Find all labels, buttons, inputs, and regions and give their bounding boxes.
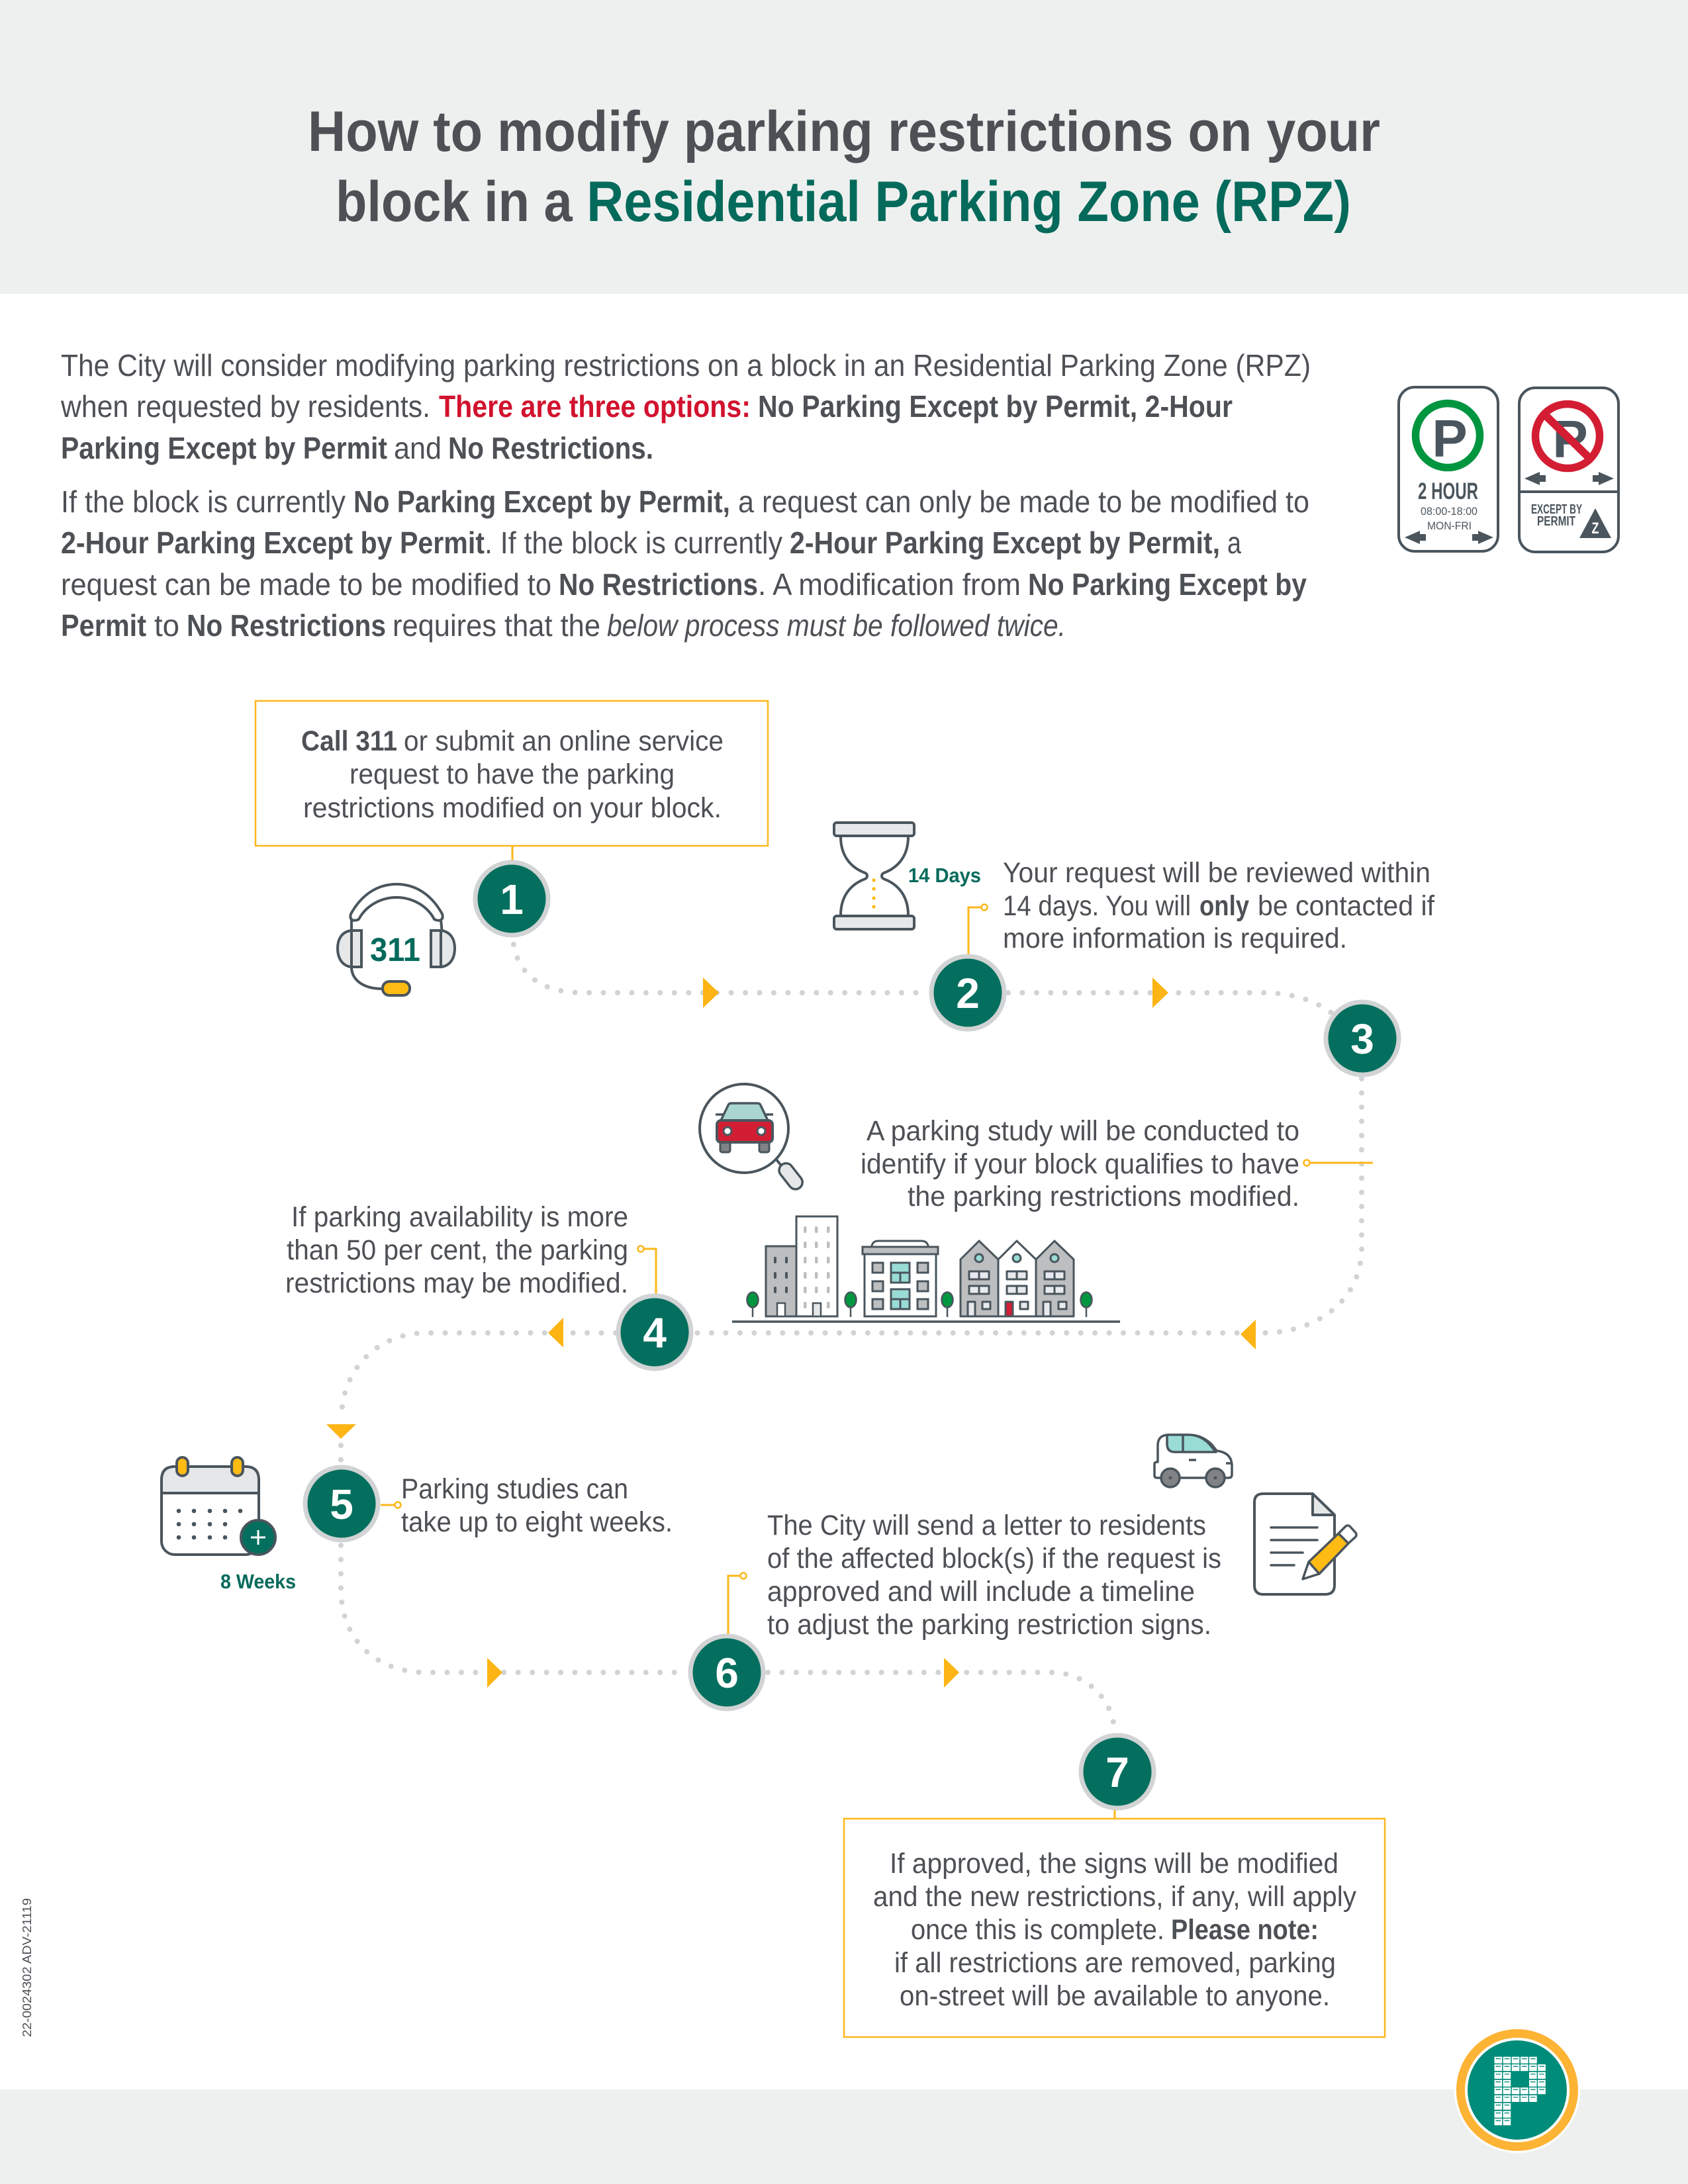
icon: no parking except by permit sign <box>1519 388 1618 552</box>
apartment block <box>863 1241 938 1316</box>
step 7 callout box: if all restrictions are removed, parking <box>894 1947 1336 1979</box>
step 3 text <box>861 1115 1299 1212</box>
icon: letter and pencil <box>1254 1494 1356 1594</box>
icon: 2 hour parking sign <box>1399 387 1498 551</box>
icon: 2 hour parking sign: MON-FRI <box>1427 520 1472 532</box>
intro text: No Parking Except by Permit, <box>353 484 730 519</box>
step 6 text: to adjust the parking restriction signs. <box>767 1609 1211 1641</box>
step 7 callout box: Please note: <box>1171 1914 1319 1946</box>
step 2 marker: 2 <box>956 970 980 1017</box>
intro text: to <box>154 608 179 643</box>
label: 8 weeks: 8 Weeks <box>220 1570 296 1593</box>
intro text: No Restrictions. <box>448 431 653 465</box>
step 5 marker: 5 <box>330 1480 353 1528</box>
step 4 marker: 4 <box>643 1309 667 1357</box>
step 4 text <box>285 1201 628 1299</box>
intro text: The City will consider modifying parking restrictions on a block in an Residential Parking Zone (RPZ) <box>61 348 1311 383</box>
step 3 text: A parking study will be conducted to <box>867 1115 1299 1147</box>
step 6 text: The City will send a letter to residents <box>767 1510 1206 1541</box>
step 6 marker: 6 <box>715 1649 739 1697</box>
icon: hourglass <box>834 823 914 929</box>
step 7 marker <box>1081 1735 1154 1808</box>
intro text: and <box>394 431 442 465</box>
icon: 2 hour parking sign: P <box>1432 409 1468 468</box>
icon: car side view <box>1154 1435 1232 1487</box>
intro text: No Restrictions <box>187 608 386 643</box>
process path: dotted route <box>341 944 1362 1722</box>
header band <box>0 0 1688 294</box>
document code, vertical: 22-0024302 ADV-21119 <box>20 1898 34 2037</box>
title: block in a Residential Parking Zone (RPZ) <box>336 170 1351 234</box>
step 4 text: If parking availability is more <box>291 1201 628 1233</box>
step 7 marker: 7 <box>1105 1749 1129 1796</box>
step 5 text: take up to eight weeks. <box>401 1506 673 1538</box>
step 7 callout box <box>844 1819 1385 2037</box>
step 2 text: 14 days. You will <box>1003 890 1191 922</box>
step 5 text <box>401 1473 673 1538</box>
icon: no parking except by permit sign: Z <box>1591 520 1599 537</box>
step 1 callout box: request to have the parking <box>350 758 675 790</box>
title: How to modify parking restrictions on your <box>308 100 1380 163</box>
intro text: 2-Hour Parking Except by Permit, <box>790 525 1220 560</box>
intro text: No Parking Except by Permit, 2-Hour <box>758 389 1233 424</box>
step 1 marker <box>475 862 548 935</box>
icon: calendar <box>162 1457 275 1555</box>
step 6 marker <box>690 1636 763 1709</box>
icon: no parking except by permit sign: P <box>1552 410 1588 469</box>
icon: no parking except by permit sign: PERMIT <box>1537 514 1575 529</box>
intro text: when requested by residents. <box>60 389 430 424</box>
step 2 text <box>1003 857 1435 954</box>
step 6 text: approved and will include a timeline <box>767 1576 1195 1608</box>
icon: magnifier with car <box>700 1084 805 1192</box>
title <box>308 100 1380 234</box>
step 7 callout box: once this is complete. <box>911 1914 1164 1946</box>
label: 14 days: 14 Days <box>908 864 981 887</box>
intro text: a <box>1227 525 1241 560</box>
step 1 callout box: Call 311 <box>301 725 397 757</box>
step 4 text: than 50 per cent, the parking <box>287 1234 628 1266</box>
icon: no parking except by permit sign: EXCEPT BY <box>1531 502 1582 517</box>
step 5 text: Parking studies can <box>401 1473 628 1505</box>
intro text: a request can only be made to be modified to <box>738 484 1309 519</box>
intro text: If the block is currently <box>61 484 346 519</box>
intro text: below process must be followed twice. <box>607 608 1066 643</box>
step 7 callout box: and the new restrictions, if any, will apply <box>873 1881 1356 1913</box>
arrows: orange direction markers <box>326 978 1256 1688</box>
step 3 text: identify if your block qualifies to have <box>861 1148 1299 1180</box>
step 6 text: of the affected block(s) if the request is <box>767 1543 1221 1574</box>
intro text: There are three options: <box>439 389 751 424</box>
step 1 callout box <box>256 701 768 846</box>
icon: 311 headset: 311 <box>370 931 420 968</box>
icon: 2 hour parking sign: 08:00-18:00 <box>1421 506 1477 518</box>
step 3 text: the parking restrictions modified. <box>908 1181 1299 1212</box>
step 7 callout box: If approved, the signs will be modified <box>890 1848 1338 1880</box>
intro text: Permit <box>61 608 146 643</box>
step 1 callout box: or submit an online service <box>404 725 724 757</box>
footer band <box>0 2089 1688 2184</box>
step 3 marker <box>1326 1002 1399 1075</box>
logo cars forming a letter P <box>1495 2059 1546 2122</box>
intro text: 2-Hour Parking Except by Permit <box>61 525 485 560</box>
step 7 callout box: on-street will be available to anyone. <box>900 1980 1330 2012</box>
intro text: requires that the <box>393 608 600 643</box>
step 4 marker <box>618 1296 691 1369</box>
intro text: No Parking Except by <box>1028 567 1307 602</box>
step 1 marker: 1 <box>500 876 524 923</box>
intro text: Parking Except by Permit <box>61 431 387 465</box>
row houses <box>961 1241 1074 1316</box>
towers <box>766 1216 837 1316</box>
icon: streetscape of buildings <box>732 1216 1120 1322</box>
intro text <box>60 348 1311 643</box>
intro text: . If the block is currently <box>485 525 782 560</box>
step 2 text: be contacted if <box>1258 890 1435 922</box>
icon: 2 hour parking sign: 2 HOUR <box>1418 478 1478 504</box>
intro text: . A modification from <box>758 567 1021 602</box>
step 2 text: only <box>1199 890 1249 922</box>
step 2 text: more information is required. <box>1003 923 1347 954</box>
step 2 text: Your request will be reviewed within <box>1003 857 1430 889</box>
callout leaders <box>381 846 1373 1819</box>
logo: parking roundel <box>1454 2026 1581 2154</box>
step 2 marker <box>931 956 1004 1029</box>
intro text: No Restrictions <box>559 567 758 602</box>
step 1 callout box: restrictions modified on your block. <box>303 792 722 824</box>
step 5 marker <box>305 1467 378 1540</box>
step 6 text <box>767 1510 1221 1641</box>
icon: 311 headset <box>338 884 455 995</box>
step 4 text: restrictions may be modified. <box>285 1267 628 1299</box>
trees <box>747 1292 1092 1317</box>
intro text: request can be made to be modified to <box>61 567 551 602</box>
step 3 marker: 3 <box>1350 1015 1374 1063</box>
